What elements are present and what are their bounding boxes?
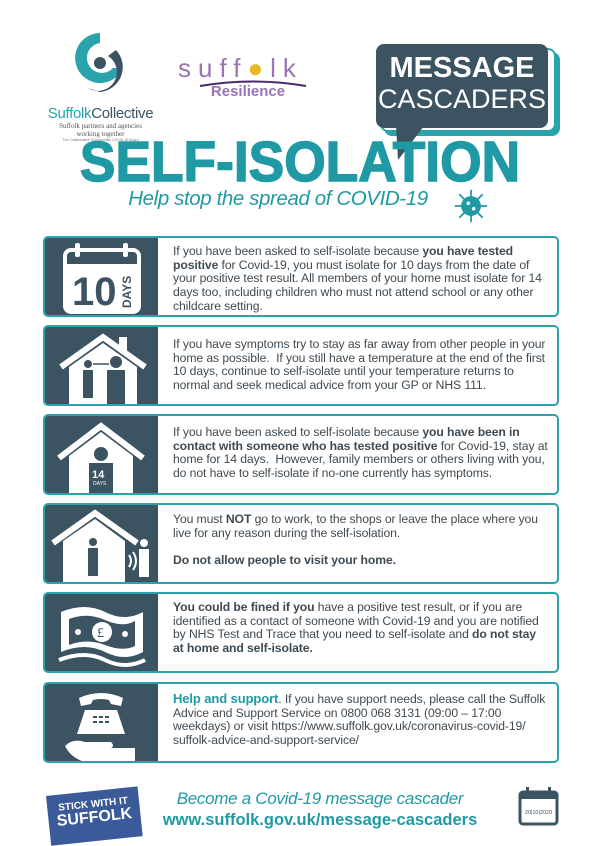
badge: Message Cascaders: CASCADERS xyxy=(378,84,546,114)
panel: contact xyxy=(43,414,559,495)
text: Help and support. If you have support needs, please call the Suffolk Advice and Support Service on 0800 068 3131 (09:00 – 17:00 weekdays) or visit https://www.suffolk.gov.uk/coronavirus-covid-19/ suffolk-advice-and-support-service/ xyxy=(173,691,545,747)
panel: symptoms xyxy=(43,325,559,406)
badge: Stick with it Suffolk: SUFFOLK xyxy=(56,805,133,830)
text: If you have symptoms try to stay as far away from other people in your home as possible. If you still have a temperature at the end of the first 10 days, continue to self-isolate until your temperature returns to normal and seek medical advice from your GP or NHS 111. xyxy=(173,337,545,392)
icon: virus xyxy=(454,190,488,222)
logo: Suffolk Resilience: Resilience xyxy=(211,83,285,100)
text: If you have been asked to self-isolate because you have tested positive for Covid-19, you must isolate for 10 days from the date of your positive test result. All members of your home must isolate for 14 days too, including children who must not attend school or any other childcare setting. xyxy=(173,244,542,313)
icon: house 14 days: 14 xyxy=(92,469,105,481)
text: You must NOT go to work, to the shops or leave the place where you live for any reason during the self-isolation. xyxy=(173,512,538,540)
footer text: www.suffolk.gov.uk/message-cascaders xyxy=(163,811,477,829)
icon: house 14 days xyxy=(45,416,158,493)
logo: Suffolk Collective: Suffolk partners and agencies xyxy=(59,122,142,130)
icon: banknote: £ xyxy=(97,626,104,641)
text xyxy=(173,512,538,567)
logo: Suffolk Collective: SuffolkCollective xyxy=(48,105,153,122)
icon: date calendar xyxy=(518,787,558,826)
panel: must not go out xyxy=(43,503,559,584)
icon: banknote xyxy=(45,594,158,671)
text: You could be fined if you have a positive test result, or if you are identified as a contact of someone with Covid-19 and you are notified by NHS Test and Trace that you need to self-isolate and do not stay at home and self-isolate. xyxy=(173,600,539,655)
logo: Suffolk Collective: working together xyxy=(76,130,124,138)
icon: 10 days calendar xyxy=(45,238,158,315)
text: Do not allow people to visit your home. xyxy=(173,553,396,567)
badge: Message Cascaders: MESSAGE xyxy=(389,52,535,84)
text: If you have been asked to self-isolate because you have been in contact with someone who has tested positive for Covid-19, stay at home for 14 days. However, family members or others living with you, do not have to self-isolate if no-one currently has symptoms. xyxy=(173,425,548,480)
panel: tested positive xyxy=(43,236,559,317)
logo: Suffolk Collective: The Collaborative Communities COVID-19 Board xyxy=(62,138,139,142)
logo: Suffolk Resilience xyxy=(178,53,306,100)
icon: house with distanced people xyxy=(45,327,158,404)
badge: Stick with it Suffolk xyxy=(46,786,143,846)
title: SELF-ISOLATION xyxy=(80,130,520,194)
panel: fines xyxy=(43,592,559,673)
badge: Stick with it Suffolk: STICK WITH IT xyxy=(58,795,129,814)
subtitle: Help stop the spread of COVID-19 xyxy=(128,187,428,210)
footer text xyxy=(162,789,477,829)
icon: house 14 days: DAYS xyxy=(93,481,107,487)
icon: 10 days calendar: DAYS xyxy=(120,276,134,308)
icon: house with visitor xyxy=(45,505,158,582)
logo: Suffolk Resilience: suff●lk xyxy=(178,53,303,83)
badge: Message Cascaders xyxy=(376,44,560,160)
icon: 10 days calendar: 10 xyxy=(72,270,116,314)
panel: help and support xyxy=(43,682,559,763)
logo: Suffolk Collective xyxy=(48,33,153,142)
icon: phone in hand xyxy=(45,684,158,761)
footer text: Become a Covid-19 message cascader xyxy=(177,789,463,808)
icon: date calendar: 20|10|2020 xyxy=(525,810,552,816)
